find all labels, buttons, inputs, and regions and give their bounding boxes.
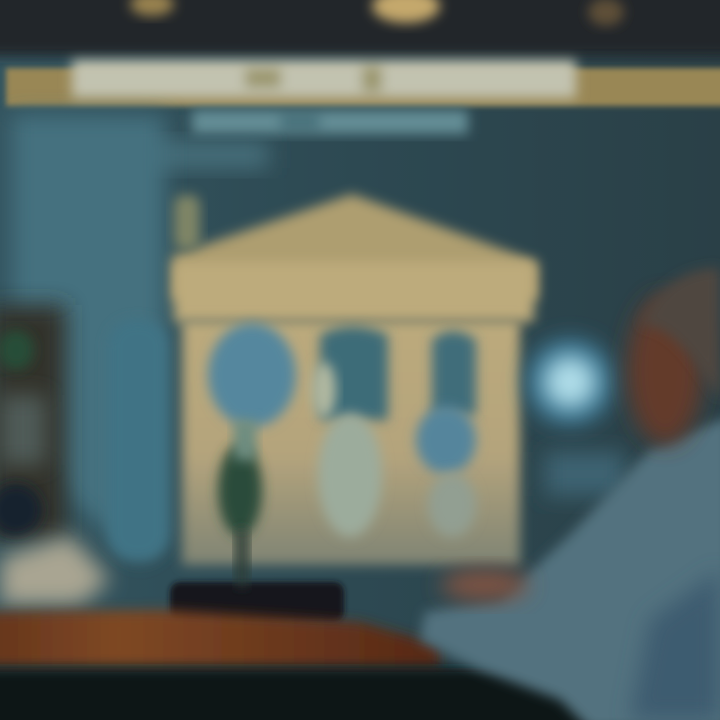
right arch	[432, 331, 476, 415]
ceiling light: left	[130, 0, 174, 16]
middle pale vessel	[318, 413, 382, 537]
person shoulder shade	[630, 570, 720, 720]
person body	[420, 420, 720, 720]
person head	[627, 295, 703, 445]
left shelf	[0, 305, 66, 540]
bottom dark	[0, 668, 720, 720]
table	[0, 610, 440, 668]
right caption block	[545, 452, 625, 496]
white papers	[0, 535, 110, 605]
right pale vessel	[428, 473, 476, 537]
ceiling light: right	[588, 0, 624, 26]
top dark ceiling strip	[0, 0, 720, 56]
black base	[170, 582, 344, 622]
green stem	[218, 444, 262, 536]
person hair	[640, 268, 720, 400]
neck	[234, 420, 256, 460]
small caption line	[78, 142, 268, 168]
title bar	[72, 60, 576, 98]
shelf dark object	[0, 484, 42, 536]
left panel lower tone	[108, 320, 168, 560]
middle arch	[320, 326, 388, 420]
right blue circle	[416, 406, 476, 474]
person hand	[441, 569, 529, 601]
shelf green plant	[0, 330, 34, 370]
temple	[172, 194, 538, 565]
temple entablature	[174, 262, 534, 322]
left blue panel	[12, 115, 165, 560]
subtitle line	[192, 110, 468, 134]
person	[420, 268, 720, 720]
gold title band	[6, 68, 720, 106]
neck highlight	[312, 362, 336, 418]
temple pediment	[172, 194, 538, 300]
temple body	[182, 320, 520, 565]
blue circle left	[208, 323, 296, 427]
small finial	[174, 195, 200, 250]
glowing orb	[526, 338, 614, 426]
stem of stand	[236, 530, 248, 586]
shelf panel	[0, 395, 46, 465]
ceiling light: center	[372, 0, 440, 23]
